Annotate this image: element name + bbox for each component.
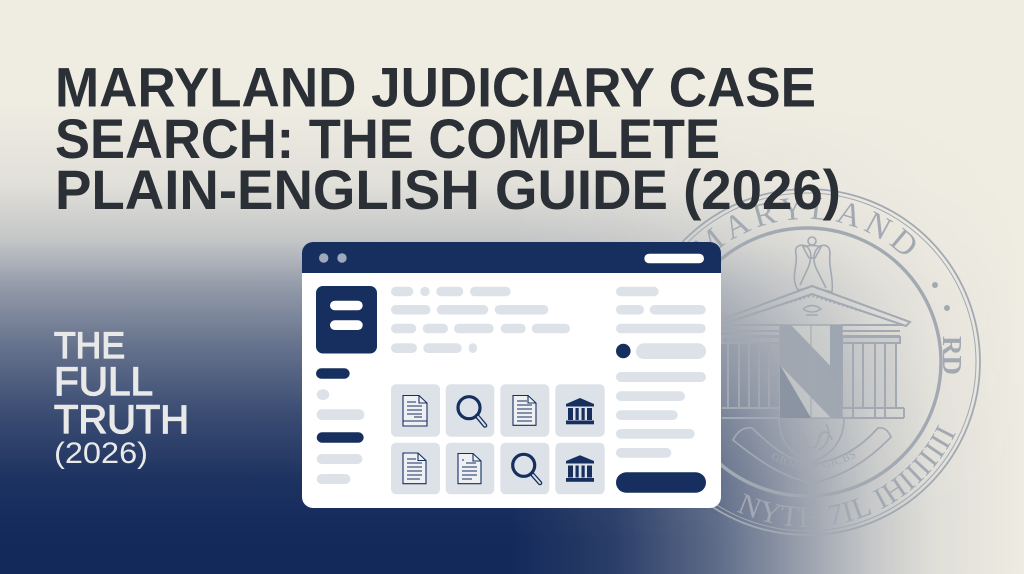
title: MARYLAND JUDICIARY CASE bbox=[55, 56, 816, 118]
title: SEARCH: THE COMPLETE bbox=[55, 108, 720, 170]
placeholder text lines bbox=[391, 287, 570, 353]
window header bar bbox=[302, 242, 721, 273]
icon: document bbox=[403, 453, 426, 484]
icon: courthouse bbox=[566, 398, 594, 424]
side label: the full truth: THE bbox=[54, 325, 125, 366]
icon: document bbox=[458, 454, 481, 484]
seal lettering: MARYLAND bbox=[694, 197, 916, 254]
seal lettering: RD bbox=[937, 336, 967, 375]
right column bbox=[616, 287, 706, 493]
seal rings bbox=[634, 189, 980, 535]
icon: magnifier bbox=[458, 397, 485, 426]
seal lettering: NYTH 7IL IHIIIIIII bbox=[737, 424, 956, 527]
title: PLAIN-ENGLISH GUIDE (2026) bbox=[55, 159, 841, 221]
seal motto: GIOZS·Θ·GICBS bbox=[772, 451, 856, 468]
seal columns bbox=[722, 343, 904, 418]
side label: the full truth: (2026) bbox=[54, 437, 148, 470]
background bbox=[0, 148, 977, 574]
seal dots bbox=[932, 282, 950, 311]
seal eagles bbox=[794, 237, 832, 292]
icon tiles bbox=[391, 384, 605, 494]
icon: document bbox=[403, 396, 427, 426]
seal lettering bbox=[694, 197, 967, 527]
logo tile bbox=[316, 286, 377, 354]
side label: the full truth: TRUTH bbox=[54, 398, 189, 442]
icon: courthouse bbox=[566, 455, 594, 482]
icon: magnifier bbox=[513, 454, 540, 483]
left sidebar items bbox=[316, 368, 364, 484]
side label: the full truth: FULL bbox=[54, 360, 153, 404]
seal building pediment bbox=[712, 286, 910, 343]
seal banner bbox=[733, 424, 891, 483]
browser window bbox=[302, 242, 721, 508]
seal shield bbox=[779, 325, 844, 462]
window body bbox=[302, 242, 721, 508]
title bbox=[55, 56, 841, 221]
seal of Maryland watermark bbox=[682, 188, 981, 536]
side label: the full truth bbox=[54, 325, 189, 470]
icon: document bbox=[513, 396, 536, 425]
